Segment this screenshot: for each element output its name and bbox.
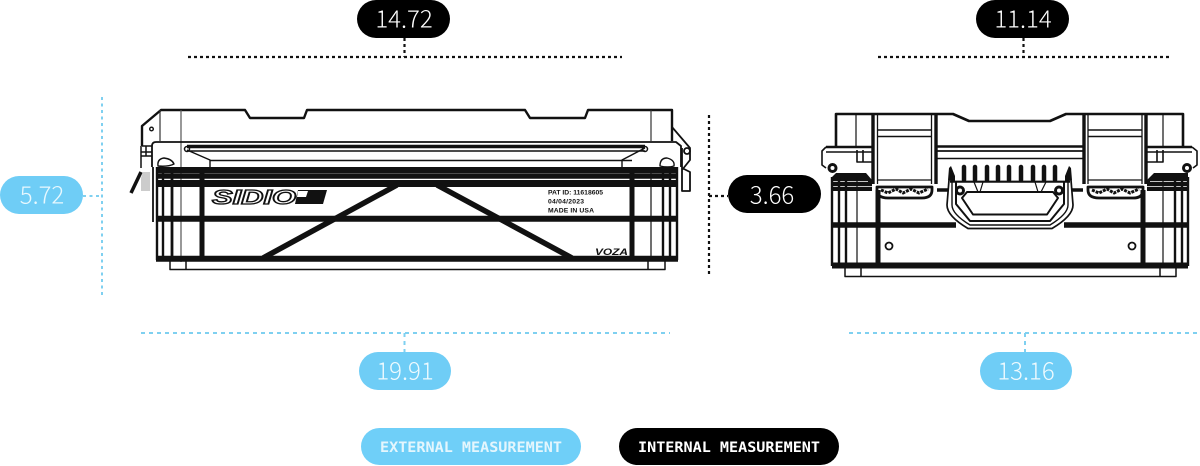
patent text: 04/04/2023	[548, 198, 584, 206]
patent text	[548, 190, 603, 214]
dimension: 3.66 internal height	[709, 115, 821, 275]
right ear	[1192, 147, 1197, 168]
legend: external measurement: EXTERNAL MEASUREMENT	[380, 440, 562, 456]
dimension: 14.72 internal width: 14.72	[375, 0, 433, 34]
base	[170, 261, 665, 270]
base	[845, 268, 1176, 276]
dimension: 3.66 internal height: 3.66	[750, 176, 794, 210]
rim	[152, 142, 681, 167]
dimension: 13.16 external depth: 13.16	[997, 352, 1055, 386]
dimension: 14.72 internal width	[188, 0, 622, 57]
lid outline	[142, 110, 672, 146]
patent text: PAT ID: 11618605	[548, 190, 603, 196]
legend: external measurement	[361, 428, 581, 465]
left latch	[141, 172, 150, 191]
dimension: 19.91 external width	[141, 333, 670, 390]
comb teeth	[964, 167, 1055, 180]
handle	[947, 180, 1073, 228]
mount holes	[886, 242, 892, 250]
body verticals	[832, 177, 1188, 266]
dimension: 5.72 external height: 5.72	[20, 176, 64, 210]
left strap	[873, 114, 936, 184]
small maker logo: VOZA	[595, 247, 628, 257]
lid outline	[836, 114, 1183, 146]
body verticals	[157, 167, 163, 260]
diagonals	[263, 185, 572, 258]
legend: internal measurement: INTERNAL MEASUREMENT	[638, 440, 820, 456]
bands	[832, 222, 1188, 228]
dimension: 11.14 internal depth: 11.14	[994, 0, 1052, 34]
dimension: 5.72 external height	[0, 97, 102, 295]
SIDIO logo	[212, 187, 327, 209]
bands	[156, 167, 678, 173]
side view case drawing	[131, 110, 690, 270]
SIDIO logo: SIDIO	[212, 187, 297, 209]
right strap	[1084, 114, 1146, 184]
left ear	[822, 147, 1163, 168]
legend: internal measurement	[619, 428, 839, 465]
right latch	[672, 127, 690, 191]
patent text: MADE IN USA	[548, 208, 594, 214]
rim between straps	[937, 145, 1083, 148]
front view case drawing	[822, 114, 1197, 276]
dimension: 19.91 external width: 19.91	[376, 352, 434, 386]
dimension: 11.14 internal depth	[878, 0, 1171, 57]
dimension: 13.16 external depth	[849, 333, 1200, 390]
black side blocks	[832, 173, 1188, 191]
